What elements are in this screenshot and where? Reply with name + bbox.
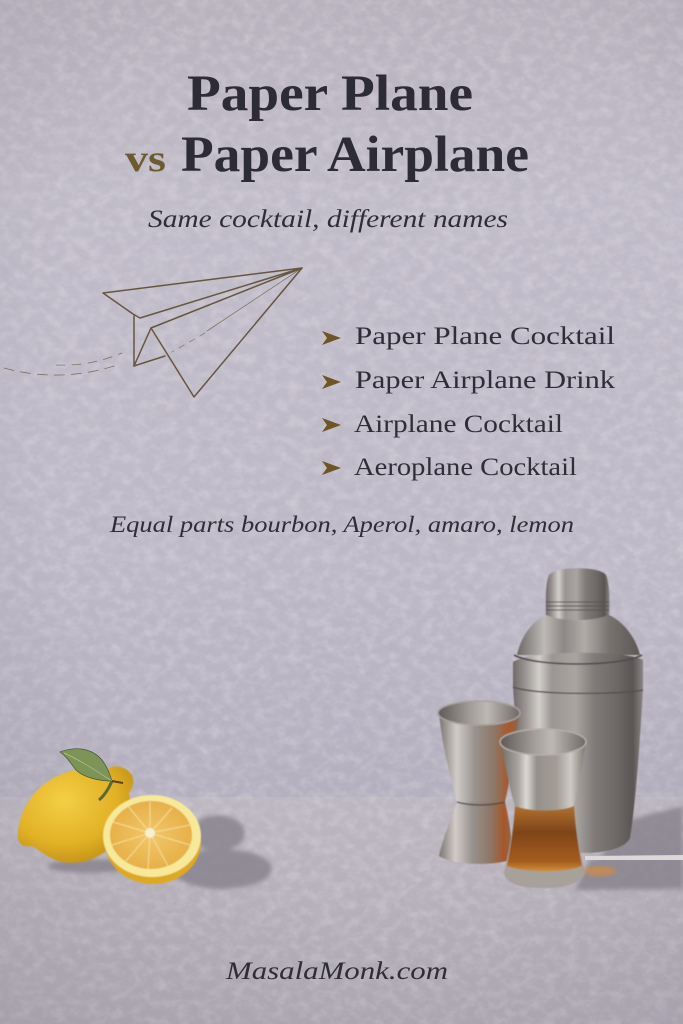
item: Aeroplane Cocktail: Aeroplane Cocktail <box>354 452 577 481</box>
illustration: lemons <box>18 749 272 889</box>
subtitle: Same cocktail, different names <box>148 206 508 233</box>
title <box>125 66 529 183</box>
item: Paper Airplane Drink: Paper Airplane Drink <box>355 365 615 394</box>
table shadows <box>575 806 683 890</box>
cut lemon <box>103 795 201 884</box>
whole lemon <box>18 766 133 863</box>
item: Airplane Cocktail: Airplane Cocktail <box>354 409 563 438</box>
illustration: shaker and jiggers <box>438 568 683 890</box>
shaker <box>513 568 643 853</box>
item: Paper Plane Cocktail: Paper Plane Cocktail <box>355 321 615 350</box>
table surface <box>0 797 683 1024</box>
title: Paper Plane <box>187 66 473 122</box>
website credit: MasalaMonk.com <box>225 958 448 985</box>
title: Paper Airplane <box>181 127 529 183</box>
background wall <box>0 0 683 798</box>
glow on table <box>584 866 616 876</box>
list: alternate names <box>322 321 615 481</box>
front jigger with amber liquid <box>500 729 586 888</box>
leaf <box>60 749 123 800</box>
back jigger <box>438 701 520 864</box>
icon: paper plane <box>4 268 302 397</box>
recipe line: Equal parts bourbon, Aperol, amaro, lemon <box>109 512 574 537</box>
lemon shadows <box>48 815 272 889</box>
title: vs <box>125 138 166 180</box>
